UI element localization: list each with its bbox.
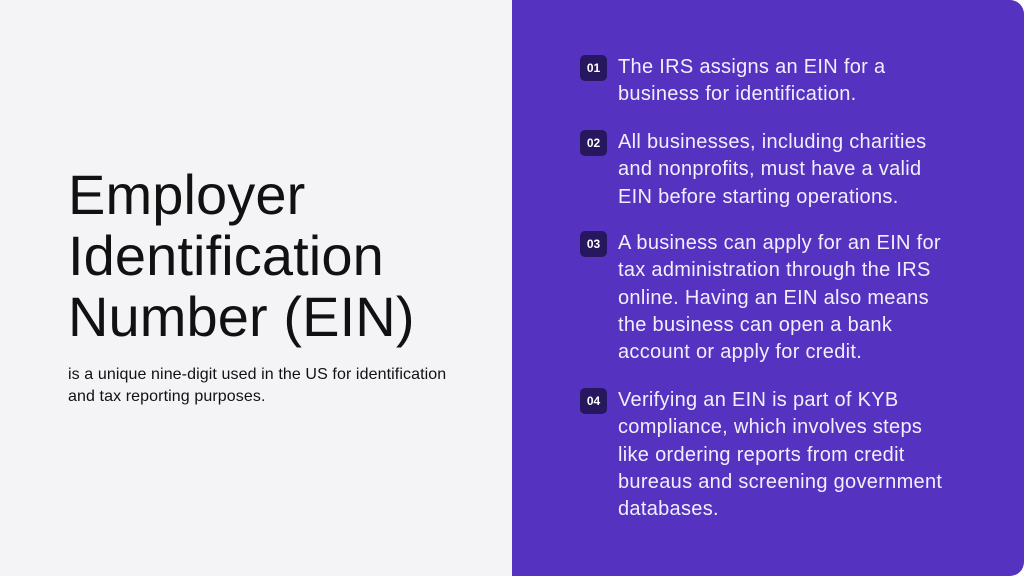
subtitle: and tax reporting purposes. [68,388,266,405]
title [68,163,415,348]
title: Employer [68,163,305,226]
item 04: Verifying an EIN is part of KYB compliance, which involves steps like ordering reports from credit bureaus and screening government databases. [618,389,942,520]
item 01: The IRS assigns an EIN for a business for identification. [618,56,885,105]
panel: right list [512,0,1024,576]
title: Number (EIN) [68,285,415,348]
title: Identification [68,224,384,287]
subtitle: is a unique nine-digit used in the US for identification [68,366,446,383]
panel: left [0,0,512,576]
subtitle [68,366,446,405]
panel: right list: 03 [587,237,600,251]
item 02: All businesses, including charities and nonprofits, must have a valid EIN before starting operations. [618,131,926,208]
item 03: A business can apply for an EIN for tax administration through the IRS online. Having an EIN also means the business can open a bank account or apply for credit. [618,232,941,363]
panel: right list: 04 [587,394,600,408]
panel: right list: 01 [587,61,600,75]
panel: right list: 02 [587,136,600,150]
